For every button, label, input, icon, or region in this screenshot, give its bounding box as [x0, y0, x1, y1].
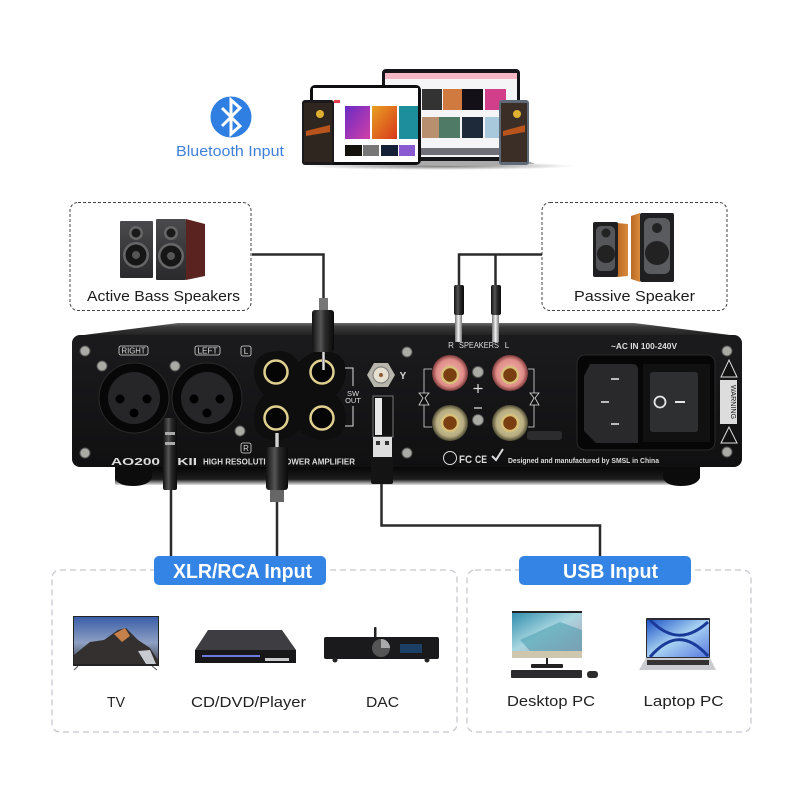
heading: XLR/RCA input: XLR/RCA Input	[173, 561, 312, 583]
XLR left connector	[172, 363, 242, 433]
bluetooth label: Bluetooth Input	[176, 143, 285, 160]
channel labels: RIGHT	[122, 346, 146, 356]
icon: DAC	[324, 627, 439, 662]
warning label	[720, 360, 737, 443]
devices: laptop, tablet and phones	[302, 69, 575, 170]
amplifier rear panel	[72, 323, 742, 486]
compliance marks and manufacturer text: FC	[459, 454, 472, 466]
label: DAC: DAC	[366, 694, 399, 711]
icon: active speakers	[120, 219, 205, 280]
model text: HIGH RESOLUTION POWER AMPLIFIER	[203, 456, 355, 466]
bluetooth input group	[176, 96, 285, 160]
panel: USB input	[467, 570, 751, 732]
panel: passive speaker	[542, 202, 727, 310]
SW OUT bracket and label: OUT	[345, 396, 361, 405]
cable: active bass speakers to SW OUT	[252, 254, 334, 370]
icon: TV	[73, 616, 159, 670]
model text: AO200 MKII	[111, 457, 197, 468]
speaker terminals: L	[505, 341, 510, 350]
channel labels: LEFT	[198, 346, 218, 356]
channel labels: L	[244, 347, 249, 356]
cable: XLR plug	[163, 418, 177, 556]
screws	[80, 346, 732, 458]
heading: USB input	[519, 556, 691, 585]
warning label: WARNING	[729, 385, 736, 419]
compliance marks and manufacturer text: CE	[475, 454, 487, 466]
SW OUT bracket and label	[345, 368, 361, 426]
speaker terminals	[419, 341, 562, 441]
model text	[111, 456, 355, 468]
top face	[76, 323, 738, 336]
label: laptop PC: Laptop PC	[644, 693, 724, 710]
antenna connector	[367, 363, 407, 387]
RCA jacks	[254, 351, 346, 440]
icon: DVD player	[195, 630, 296, 663]
XLR right connector	[99, 363, 169, 433]
label: Active Bass Speakers	[87, 288, 240, 305]
icon: bluetooth	[210, 96, 252, 138]
antenna connector: Y	[400, 371, 407, 382]
feet and under shadow	[115, 466, 700, 486]
heading: USB input: USB Input	[563, 561, 658, 583]
heading: XLR/RCA input	[154, 556, 326, 585]
label: desktop PC: Desktop PC	[507, 693, 595, 710]
cable: USB plug	[371, 396, 600, 557]
panel: XLR/RCA input	[52, 570, 457, 732]
SW OUT bracket and label: SW	[347, 389, 360, 398]
compliance marks and manufacturer text	[444, 449, 660, 466]
speaker terminals: SPEAKERS	[459, 341, 499, 350]
speaker terminals: R	[448, 341, 454, 350]
icon: passive speakers	[593, 213, 674, 282]
label: Passive Speaker	[574, 288, 695, 305]
label: TV: TV	[107, 694, 125, 711]
icon: desktop PC	[511, 611, 598, 678]
label: CD/DVD/Player: CD/DVD/Player	[191, 694, 306, 711]
channel labels	[119, 346, 251, 453]
cable: RCA plug	[266, 433, 288, 556]
panel body	[72, 335, 742, 467]
AC inlet and power switch: ~AC IN 100-240V	[611, 341, 677, 351]
AC inlet and power switch	[577, 341, 715, 450]
cable: passive speaker to terminals	[454, 254, 542, 342]
panel: active bass speakers	[70, 202, 251, 310]
compliance marks and manufacturer text: Designed and manufactured by SMSL in China	[508, 456, 660, 465]
channel labels: R	[243, 444, 249, 453]
icon: laptop PC	[639, 618, 716, 670]
